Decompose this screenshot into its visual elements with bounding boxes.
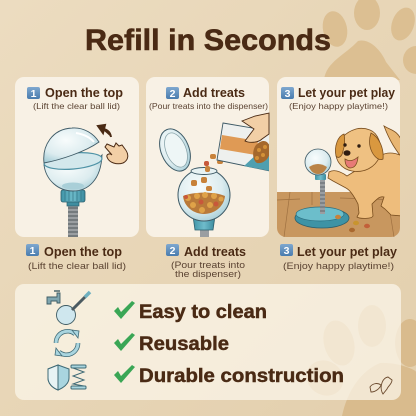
step 2 heading: Add treats [183,86,245,100]
step 2 caption: 2 [170,245,176,257]
step 2 caption [166,244,246,280]
step 2 subtext: (Pour treats into the dispenser) [149,101,268,111]
puppy face details [343,143,361,156]
step 2 caption: (Pour treats into [171,260,245,271]
icon: clear ball with open lid [43,128,103,191]
icon: ball with treats [178,168,230,221]
icon: treat bag [217,123,270,171]
panel: benefits [15,284,401,400]
icon: toy base [295,207,349,228]
step 1 subtext: (Lift the clear ball lid) [33,101,120,111]
icon: curved arrow [98,125,111,137]
icon: recycle arrows [55,330,79,356]
wooden floor [277,192,400,237]
step 2 caption: the dispenser) [175,269,241,280]
panel: step 3 let your pet play [277,77,402,237]
icon: toy spring and ball [305,149,331,214]
icon: faucet and brush [47,291,90,324]
icon: falling treats [191,149,223,191]
panel: step 2 add treats [146,77,270,237]
icon: pet logo [370,377,392,394]
benefit: durable construction: Durable construction [139,366,344,387]
benefit: reusable: Reusable [139,334,229,355]
step 3 subtext: (Enjoy happy playtime!) [289,101,388,111]
icon: teal collar [61,190,85,206]
step 3 caption [280,244,397,272]
step 3 caption: 3 [284,245,290,257]
decorative paw: bottom right [300,305,416,416]
icon: open lid [154,124,196,176]
step 1 caption: 1 [30,245,36,257]
step 1 caption: Open the top [44,245,122,259]
step 3 caption: Let your pet play [297,245,397,259]
step 1 heading: Open the top [45,86,123,100]
step 3 heading: Let your pet play [298,86,395,100]
title: Refill in Seconds [85,24,331,57]
icon: hand holding bag [242,113,269,142]
step 1 caption: (Lift the clear ball lid) [28,261,126,272]
icon: teal collar [193,216,215,237]
step 3 caption: (Enjoy happy playtime!) [283,261,394,272]
icon: shield and spring [48,365,86,390]
step 2 heading: 2 [170,88,176,100]
icon: threaded spring stem [68,205,78,237]
step 3 heading: 3 [285,88,291,100]
panel: step 1 open the top [15,77,139,237]
step 1 heading: 1 [31,88,37,100]
step 1 caption [26,244,126,272]
step 2 caption: Add treats [184,245,246,259]
benefit: easy to clean: Easy to clean [139,302,267,323]
decorative paw: top right [320,0,416,80]
illustration: golden puppy [328,126,402,218]
treats on the floor [335,215,370,232]
icon: pointing hand [105,143,128,164]
